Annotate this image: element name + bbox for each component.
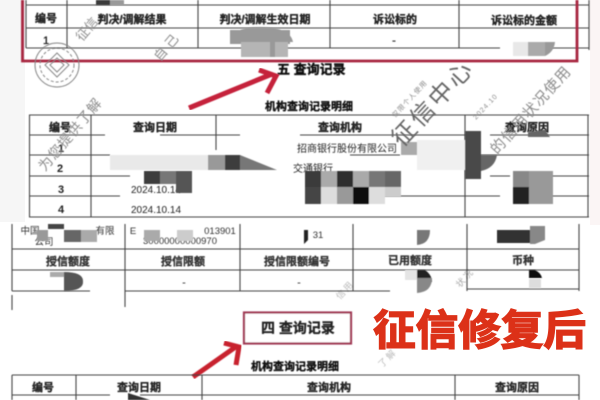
- credit line table, lower report: 授信限额编号: [264, 254, 330, 268]
- query records table, upper report: 查询机构: [318, 120, 362, 134]
- query records table, upper report: 招商银行股份有限公司: [297, 142, 397, 155]
- top credit report table: -: [392, 35, 396, 47]
- credit line table, lower report: 公司: [34, 237, 54, 248]
- mosaic blur: query table: [110, 130, 553, 204]
- top credit report table: 1: [43, 35, 49, 47]
- watermark text: 状况: [453, 266, 476, 289]
- top credit report table: 诉讼标的金额: [491, 13, 557, 27]
- credit line table, lower report: 已用额度: [388, 253, 432, 267]
- credit line table, lower report: 授信限额: [161, 254, 205, 268]
- mosaic blur: credit line table: [37, 224, 545, 293]
- credit line table, lower report: 授信额度: [46, 254, 90, 268]
- credit line table, lower report: 币种: [512, 253, 534, 267]
- watermark text: 了解: [376, 346, 399, 369]
- credit line table, lower report: E: [130, 226, 136, 237]
- credit line table, lower report: 31: [313, 230, 323, 241]
- credit line table, lower report: 30000000000970: [143, 236, 217, 247]
- section heading: 五 查询记录: 五 查询记录: [277, 62, 346, 77]
- query records table, lower report: 编号: [32, 380, 54, 394]
- watermark text: 的信用状况使用: [487, 63, 575, 158]
- credit line table, lower report: [12, 224, 579, 310]
- query records table, upper report: 3: [58, 184, 64, 196]
- top credit report table: 诉讼标的: [373, 12, 417, 26]
- watermark text: 征信中心: [387, 55, 480, 152]
- mosaic blur: top table: [96, 0, 555, 57]
- top credit report table: 判决/调解生效日期: [219, 12, 311, 26]
- query records table, upper report: 交通银行: [293, 162, 333, 175]
- watermark text: 为您提供了解: [35, 95, 105, 174]
- top credit report table: [26, 0, 589, 50]
- query records table, upper report: 4: [58, 204, 65, 216]
- top credit report table: 判决/调解结果: [97, 12, 167, 26]
- section heading box: 四 查询记录: 四 查询记录: [261, 320, 335, 336]
- query records table, lower report: 查询日期: [117, 380, 161, 394]
- credit line table, lower report: 有限: [95, 225, 115, 237]
- subheading: 机构查询记录明细: 机构查询记录明细: [265, 99, 353, 113]
- query records table, upper report: 2: [57, 163, 63, 175]
- query records table, lower report: [12, 375, 579, 400]
- section heading box: 四 查询记录: [244, 312, 351, 344]
- seal stamp: [35, 43, 79, 87]
- query records table, lower report: 查询机构: [307, 380, 351, 394]
- subheading: 机构查询记录明细 lower: 机构查询记录明细: [251, 359, 339, 373]
- watermark text: 自己: [151, 28, 184, 64]
- watermark text: 仅限个人使用: [390, 78, 429, 119]
- watermark text: [35, 14, 575, 369]
- red arrow pointing to section four: [193, 343, 239, 377]
- credit line table, lower report: 中国: [20, 225, 40, 237]
- query records table, upper report: 编号: [49, 120, 71, 134]
- red highlight box around litigation table: [22, 0, 577, 61]
- query records table, upper report: [29, 115, 589, 217]
- query records table, upper report: 2024.10.14: [131, 185, 181, 196]
- credit line table, lower report: 013901: [204, 226, 236, 237]
- query records table, upper report: 查询原因: [505, 120, 549, 134]
- watermark text: 信用: [333, 278, 356, 301]
- watermark text: 征信: [73, 14, 101, 44]
- query records table, upper report: 1: [58, 143, 64, 155]
- top credit report table: 编号: [35, 11, 57, 25]
- red arrow pointing to section five: [189, 70, 276, 108]
- watermark text: 2024.10: [472, 93, 499, 121]
- query records table, upper report: 2024.10.14: [131, 205, 181, 216]
- query records table, lower report: 查询原因: [495, 380, 539, 394]
- credit line table, lower report: -: [297, 277, 301, 289]
- credit line table, lower report: -: [182, 277, 186, 289]
- query records table, upper report: 查询日期: [133, 120, 177, 134]
- red headline: 征信修复后: 征信修复后: [373, 297, 586, 358]
